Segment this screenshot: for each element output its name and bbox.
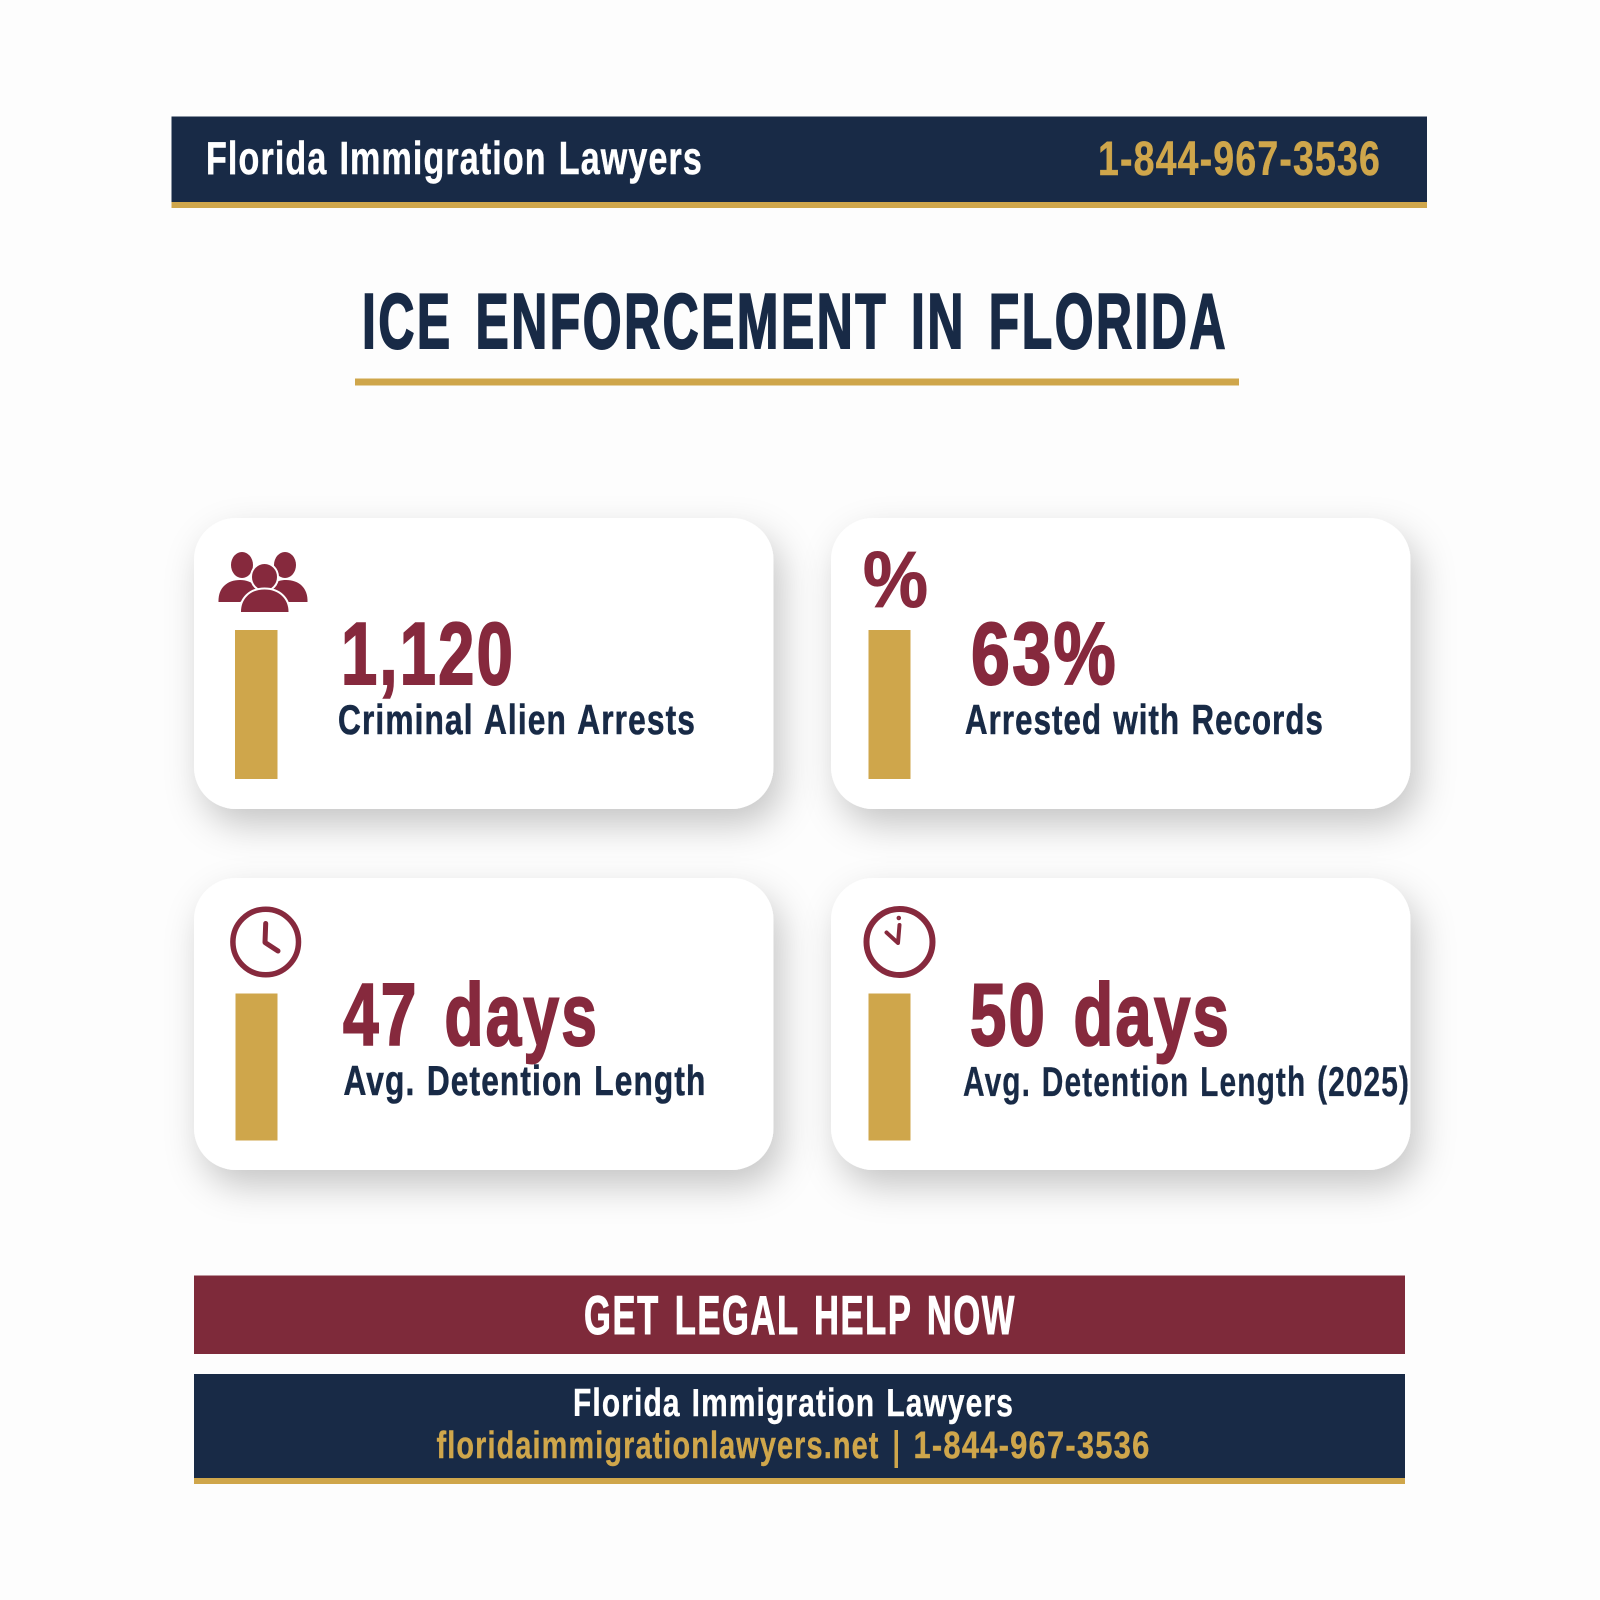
title	[355, 277, 1239, 386]
stat value: 47 days	[343, 965, 599, 1064]
gold bar	[868, 630, 910, 779]
panel: criminal alien arrests	[194, 518, 774, 809]
stat label: Criminal Alien Arrests	[338, 696, 696, 743]
header phone number: 1-844-967-3536	[1098, 133, 1381, 186]
stat label: Arrested with Records	[965, 696, 1324, 743]
icon: clock	[233, 909, 298, 975]
footer banner	[194, 1374, 1405, 1484]
gold bar	[235, 630, 278, 779]
stat value: 1,120	[341, 604, 515, 703]
stat label: Avg. Detention Length	[344, 1057, 706, 1104]
gold bar	[868, 994, 910, 1140]
panel: arrested with records	[831, 518, 1410, 809]
footer firm name: Florida Immigration Lawyers	[573, 1382, 1014, 1425]
icon: percent: %	[863, 535, 928, 624]
footer contact line: 1-844-967-3536	[914, 1425, 1150, 1467]
stat value: 63%	[971, 604, 1118, 703]
call to action banner	[194, 1276, 1405, 1354]
gold bar	[236, 994, 278, 1140]
header firm name: Florida Immigration Lawyers	[206, 132, 703, 184]
stat label: Avg. Detention Length (2025)	[963, 1058, 1410, 1105]
header banner	[172, 116, 1427, 208]
call to action banner: GET LEGAL HELP NOW	[584, 1284, 1016, 1346]
stat value: 50 days	[970, 965, 1231, 1064]
icon: people group	[218, 552, 308, 613]
icon: clock with check hands	[866, 909, 932, 975]
panel: average detention length	[194, 878, 774, 1170]
footer contact line: floridaimmigrationlawyers.net	[436, 1425, 880, 1467]
panel: average detention length 2025	[831, 878, 1410, 1170]
